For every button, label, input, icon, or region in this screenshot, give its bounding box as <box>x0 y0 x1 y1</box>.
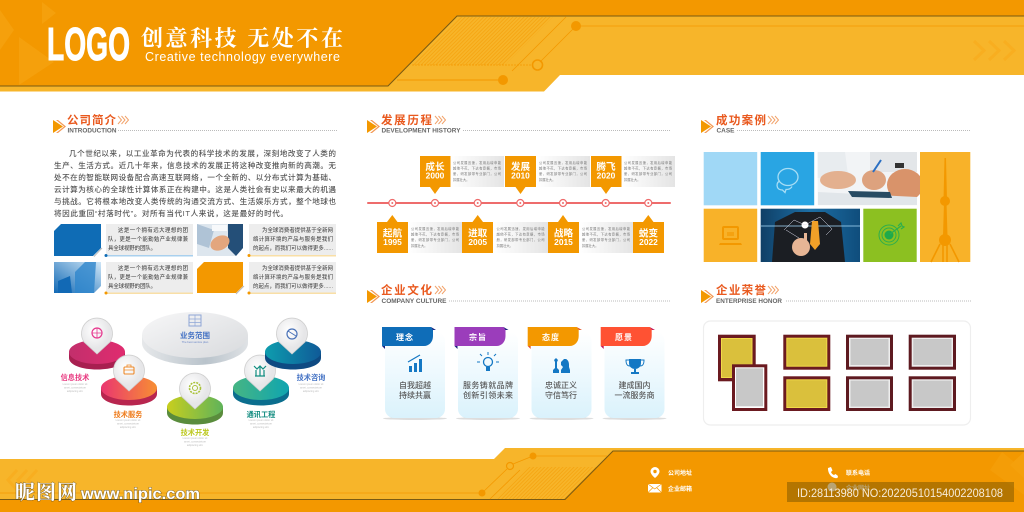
tile: orange tower silhouette <box>920 152 970 262</box>
card: mission: 服务铸就品牌 <box>463 380 513 390</box>
diagram: business scope <box>61 312 325 447</box>
tile: light blue <box>704 152 757 205</box>
card: philosophy <box>382 327 447 420</box>
panel: success cases <box>701 113 971 262</box>
honor frame container <box>704 321 970 425</box>
contact: email <box>648 484 692 493</box>
panel: enterprise honor <box>701 283 971 425</box>
header banner <box>0 0 1024 92</box>
text card 2 <box>248 224 336 257</box>
node: technical consulting <box>265 318 325 393</box>
node: technical consulting: 技术咨询 <box>297 373 325 382</box>
contact: address: 公司地址 <box>668 469 692 477</box>
milestone: 2010: 公司发展迅速，发用后增申能 <box>539 160 588 165</box>
card: mission: 创新引领未来 <box>463 390 513 400</box>
text card 4: 的起点，而我们可以做得更多...... <box>253 282 333 290</box>
node: technical service <box>101 355 157 429</box>
slogan: 创意科技 无处不在 <box>141 22 343 53</box>
node: communications engineering: 通讯工程 <box>247 410 275 419</box>
card: attitude: 态度 <box>542 332 560 342</box>
watermark: site: 昵图网 <box>15 476 77 505</box>
milestone: 2005: 进取 <box>468 228 488 240</box>
certificate: silver landscape 3 <box>846 376 893 411</box>
node: technical development: 技术开发 <box>181 428 210 437</box>
card: attitude <box>528 327 594 420</box>
text card 2: 为全球消费者提供基于全新网 <box>262 226 333 234</box>
milestone: 2005: 册，研发部带专业部门，公司 <box>496 237 544 242</box>
certificate: gold landscape 1 <box>783 335 830 370</box>
milestone: 2005: 越他不花，下达有意据，市场 <box>496 232 545 236</box>
text card 3: 这是一个拥有远大理想的团 <box>118 264 188 272</box>
milestone: 2000: 扣展壮大。 <box>453 177 469 182</box>
central disc: 业务范围 <box>180 330 210 340</box>
heading: enterprise honor: ENTERPRISE HONOR <box>716 299 783 305</box>
milestone: 2010: 册，研发部带专业部门，公司 <box>539 171 587 176</box>
node: information technology: amet, consectetuer <box>64 386 86 390</box>
heading: enterprise honor <box>701 283 971 305</box>
node: technical service: adipiscing elit. <box>120 425 136 429</box>
card: attitude: 守信笃行 <box>545 390 577 400</box>
card: vision: 愿景 <box>615 333 633 342</box>
heading: company introduction: INTRODUCTION <box>68 128 116 134</box>
central disc: The best service plan <box>182 340 209 344</box>
milestone: 2015: 2015 <box>554 237 573 247</box>
timeline axis <box>367 200 671 206</box>
intro paragraph: 将因此重回“村落时代”。对所有当代IT人来说，这是最好的时代。 <box>54 208 288 218</box>
logo: LOGO <box>47 18 130 70</box>
card: vision: 一流服务商 <box>614 390 654 400</box>
card: attitude: 忠诚正义 <box>545 381 577 390</box>
card: mission: 宗旨 <box>469 332 487 342</box>
node: communications engineering: amet, consectetuer <box>250 422 272 426</box>
tile: orange computer icon <box>704 209 757 262</box>
milestone: 2005: 扣展壮大。 <box>496 243 513 248</box>
milestone: 2000: 成长 <box>425 161 445 173</box>
certificate: gold landscape 2 <box>783 376 830 411</box>
heading: company culture: COMPANY CULTURE <box>382 299 446 305</box>
milestone: 1995: 越他不花，下达有意据，市场 <box>411 232 460 236</box>
milestone: 2010: 扣展壮大。 <box>539 177 555 182</box>
text card 3 <box>104 262 193 294</box>
card: philosophy: 理念 <box>396 332 414 342</box>
milestone: 2020: 腾飞 <box>596 161 616 173</box>
photo: handshake <box>197 224 243 256</box>
panel: development history <box>367 113 675 253</box>
milestone: 1995: 公司发展迅速，发用后增申能 <box>411 226 460 231</box>
card: philosophy: 自我超越 <box>399 380 431 390</box>
heading: enterprise honor: 企业荣誉 <box>716 283 766 297</box>
certificate: silver landscape 4 <box>909 376 956 411</box>
image tile: blue <box>54 224 102 256</box>
milestone: 2000 <box>420 156 504 194</box>
milestone: 2015: 战略 <box>554 228 574 240</box>
tile: blue chat icon <box>761 152 814 205</box>
milestone: 1995: 扣展壮大。 <box>411 243 427 248</box>
card: mission <box>454 327 520 420</box>
text card 4: 为全球消费者提供基于全新网 <box>262 264 333 272</box>
milestone: 2022: 蜕变 <box>639 228 658 240</box>
panel: company introduction <box>53 113 337 294</box>
milestone: 2022 <box>633 215 664 253</box>
milestone: 2010: 发展 <box>511 161 530 173</box>
contact: phone: 联系电话 <box>846 469 870 477</box>
milestone: 2020: 2020 <box>597 170 616 180</box>
intro paragraph: 与挑战。它将根本地改变人类传统的沟通交流方式、生活娱乐方式，整个地球也 <box>54 196 336 206</box>
milestone: 2020: 扣展壮大。 <box>624 177 640 182</box>
milestone: 2015: 越他不花，下达有意据，市场 <box>582 232 631 236</box>
milestone: 2000: 2000 <box>426 170 445 180</box>
intro paragraph: 生产、生活方式。近几十年来，信息技术的发展正将这种改变推向新的高潮。无 <box>54 160 336 170</box>
certificate: silver landscape 1 <box>846 335 893 370</box>
node: technical development: Lorem ipsum dolor sit <box>183 436 208 440</box>
text card 1: 队，更是一个能勤勉产业规律兼 <box>108 235 189 243</box>
panel: company culture <box>367 283 670 420</box>
milestone: 2005: 公司发展迅速，发用后增申能 <box>496 226 545 231</box>
milestone: 2015 <box>548 215 633 253</box>
milestone: 2010: 越他不花，下达有意据，市场 <box>539 166 588 170</box>
heading: development history: 发展历程 <box>381 113 432 127</box>
milestone: 1995: 册，研发部带专业部门，公司 <box>411 237 459 242</box>
milestone: 2020: 越他不花，下达有意据，市场 <box>624 166 673 170</box>
text card 1: 这是一个拥有远大理想的团 <box>118 226 188 234</box>
node: technical development: amet, consectetuer <box>184 440 206 444</box>
milestone: 2015: 扣展壮大。 <box>582 243 598 248</box>
heading: success cases: 成功案例 <box>716 113 766 127</box>
contact: address <box>650 467 692 478</box>
photo: buildings <box>54 262 101 293</box>
card: philosophy: 持续共赢 <box>399 390 431 400</box>
heading: development history: DEVELOPMENT HISTORY <box>382 128 460 134</box>
milestone: 1995 <box>377 215 462 253</box>
text card 4 <box>248 262 336 294</box>
node: technical consulting: adipiscing elit. <box>303 389 319 393</box>
certificate: silver landscape 2 <box>909 335 956 370</box>
node: communications engineering: adipiscing elit. <box>253 425 269 429</box>
slogan: Creative technology everywhere <box>145 50 340 64</box>
tile: green target icon <box>863 209 917 262</box>
node: communications engineering: Lorem ipsum dolor sit <box>249 418 274 422</box>
node: technical service: Lorem ipsum dolor sit <box>116 418 141 422</box>
milestone: 2020: 册，研发部带专业部门，公司 <box>624 171 672 176</box>
photo: businessman touching network <box>761 209 860 262</box>
certificate: gold portrait <box>718 335 756 381</box>
heading: development history <box>367 113 670 134</box>
node: information technology: 信息技术 <box>61 373 90 382</box>
photo: hands writing <box>818 152 923 205</box>
text card 4: 络计算环境的产品与服务是我们 <box>253 273 333 281</box>
node: technical development: adipiscing elit. <box>187 443 203 447</box>
contact: phone <box>828 467 870 478</box>
intro paragraph: 处不在的智能联网设备配合高速互联网络，一个全新的、以分布式计算为基础、 <box>54 172 336 182</box>
milestone: 2015: 公司发展迅速，发用后增申能 <box>582 226 631 231</box>
heading: company culture <box>367 283 670 305</box>
text card 1 <box>104 224 193 257</box>
intro paragraph: 云计算为核心的全球性计算体系正在构建中。这是人类社会有史以来最大的机遇 <box>54 184 336 194</box>
contact: website <box>828 482 870 492</box>
watermark: image id: ID:28113980 NO:20220510154002208108 <box>797 488 1003 500</box>
node: technical consulting: amet, consectetuer <box>300 386 322 390</box>
card: vision: 建成国内 <box>618 380 650 390</box>
node: technical service: 技术服务 <box>114 410 142 419</box>
node: information technology <box>61 318 125 393</box>
node: information technology: adipiscing elit. <box>67 389 83 393</box>
watermark: site <box>15 476 200 505</box>
milestone: 2010 <box>505 156 590 194</box>
heading: success cases <box>701 113 971 134</box>
footer banner <box>0 448 1024 512</box>
contact: website: 企业网址 <box>846 484 870 492</box>
intro paragraph: 几个世纪以来，以工业革命为代表的科学技术的发展，深刻地改变了人类的 <box>69 148 336 158</box>
watermark: image id <box>787 482 1014 502</box>
text card 2: 络计算环境的产品与服务是我们 <box>253 235 333 243</box>
node: communications engineering <box>233 355 289 429</box>
milestone: 1995: 1995 <box>383 237 402 247</box>
node: technical development <box>167 373 223 447</box>
text card 2: 的起点，而我们可以做得更多...... <box>253 244 333 252</box>
heading: company introduction: 公司简介 <box>67 113 116 127</box>
text card 3: 队，更是一个能勤勉产业规律兼 <box>108 273 189 281</box>
heading: company culture: 企业文化 <box>381 283 432 297</box>
milestone: 2000: 公司发展迅速，发用后增申能 <box>453 160 502 165</box>
text card 1: 具全球视野的团队。 <box>108 244 156 252</box>
intro paragraph <box>54 148 336 218</box>
heading: success cases: CASE <box>716 128 734 134</box>
milestone: 2020 <box>591 156 675 194</box>
milestone: 2000: 册，研发部带专业部门，公司 <box>453 171 501 176</box>
contact: email: 企业邮箱 <box>668 485 692 493</box>
card: vision <box>601 327 666 420</box>
text card 3: 具全球视野的团队。 <box>108 282 156 290</box>
milestone: 2022: 2022 <box>639 237 658 247</box>
milestone: 2010: 2010 <box>511 170 530 180</box>
milestone: 2005: 2005 <box>468 237 487 247</box>
node: technical consulting: Lorem ipsum dolor sit <box>299 382 324 386</box>
watermark: site: www.nipic.com <box>80 486 200 503</box>
node: technical service: amet, consectetuer <box>117 422 139 426</box>
image tile: orange <box>197 262 244 294</box>
node: information technology: Lorem ipsum dolor sit <box>63 382 88 386</box>
heading: company introduction <box>53 113 337 134</box>
central disc <box>142 312 248 365</box>
milestone: 2000: 越他不花，下达有意据，市场 <box>453 166 502 170</box>
certificate: silver portrait <box>732 364 767 411</box>
milestone: 2005 <box>462 215 548 253</box>
milestone: 1995: 起航 <box>383 228 402 240</box>
milestone: 2015: 册，研发部带专业部门，公司 <box>582 237 630 242</box>
milestone: 2020: 公司发展迅速，发用后增申能 <box>624 160 673 165</box>
